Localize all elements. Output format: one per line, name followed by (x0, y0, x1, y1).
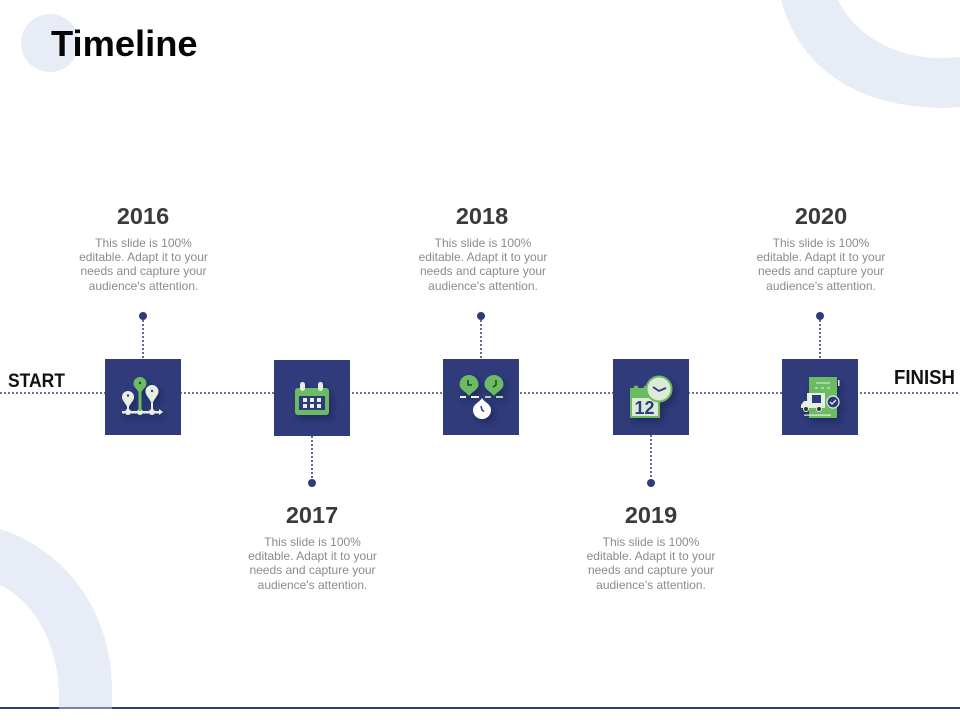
decorative circle behind title (21, 14, 79, 72)
year 2016: 2016 (117, 203, 169, 229)
finish label: FINISH (894, 367, 955, 389)
description 2017: needs and capture your (249, 563, 376, 577)
milestone 2018 (419, 203, 547, 435)
icon tile: delivery checklist (782, 359, 858, 435)
description 2016: needs and capture your (80, 264, 207, 278)
milestone 2020 (757, 203, 885, 435)
icon tile: clock pins (443, 359, 519, 435)
connector 2019 (647, 435, 655, 487)
start label: START (8, 371, 65, 392)
description 2017: audience's attention. (258, 578, 367, 592)
connector 2017 (308, 436, 316, 487)
description 2018: audience's attention. (428, 279, 538, 293)
connector 2018 (477, 312, 485, 359)
description 2019: editable. Adapt it to your (587, 549, 715, 563)
decorative ring: bottom left (0, 529, 112, 707)
description 2016: audience's attention. (89, 279, 198, 293)
year 2018: 2018 (456, 203, 508, 229)
description 2020: editable. Adapt it to your (757, 250, 885, 264)
description 2018: editable. Adapt it to your (419, 250, 547, 264)
icon tile: calendar and clock: 12 (634, 398, 655, 418)
connector 2020 (816, 312, 824, 359)
year 2020: 2020 (795, 203, 847, 229)
description 2017: editable. Adapt it to your (248, 549, 377, 563)
description 2018: needs and capture your (420, 264, 546, 278)
connector 2016 (139, 312, 147, 359)
description 2020: This slide is 100% (773, 236, 870, 250)
icon tile: map pins (105, 359, 181, 435)
description 2019: needs and capture your (588, 563, 714, 577)
timeline axis (0, 392, 960, 394)
description 2018: This slide is 100% (435, 236, 532, 250)
title: Timeline (51, 23, 198, 64)
milestone 2019 (587, 359, 715, 592)
description 2019: This slide is 100% (603, 535, 700, 549)
milestone 2016 (79, 203, 208, 435)
description 2017: This slide is 100% (264, 535, 361, 549)
description 2020: audience's attention. (766, 279, 876, 293)
description 2016: This slide is 100% (95, 236, 192, 250)
description 2019: audience's attention. (596, 578, 706, 592)
year 2017: 2017 (286, 502, 338, 528)
icon tile: calendar (274, 360, 350, 436)
icon tile: calendar and clock (613, 359, 689, 435)
bottom rule (0, 707, 960, 709)
year 2019: 2019 (625, 502, 677, 528)
milestone 2017 (248, 360, 377, 592)
description 2016: editable. Adapt it to your (79, 250, 208, 264)
decorative ring: top right (781, 0, 960, 108)
description 2020: needs and capture your (758, 264, 884, 278)
